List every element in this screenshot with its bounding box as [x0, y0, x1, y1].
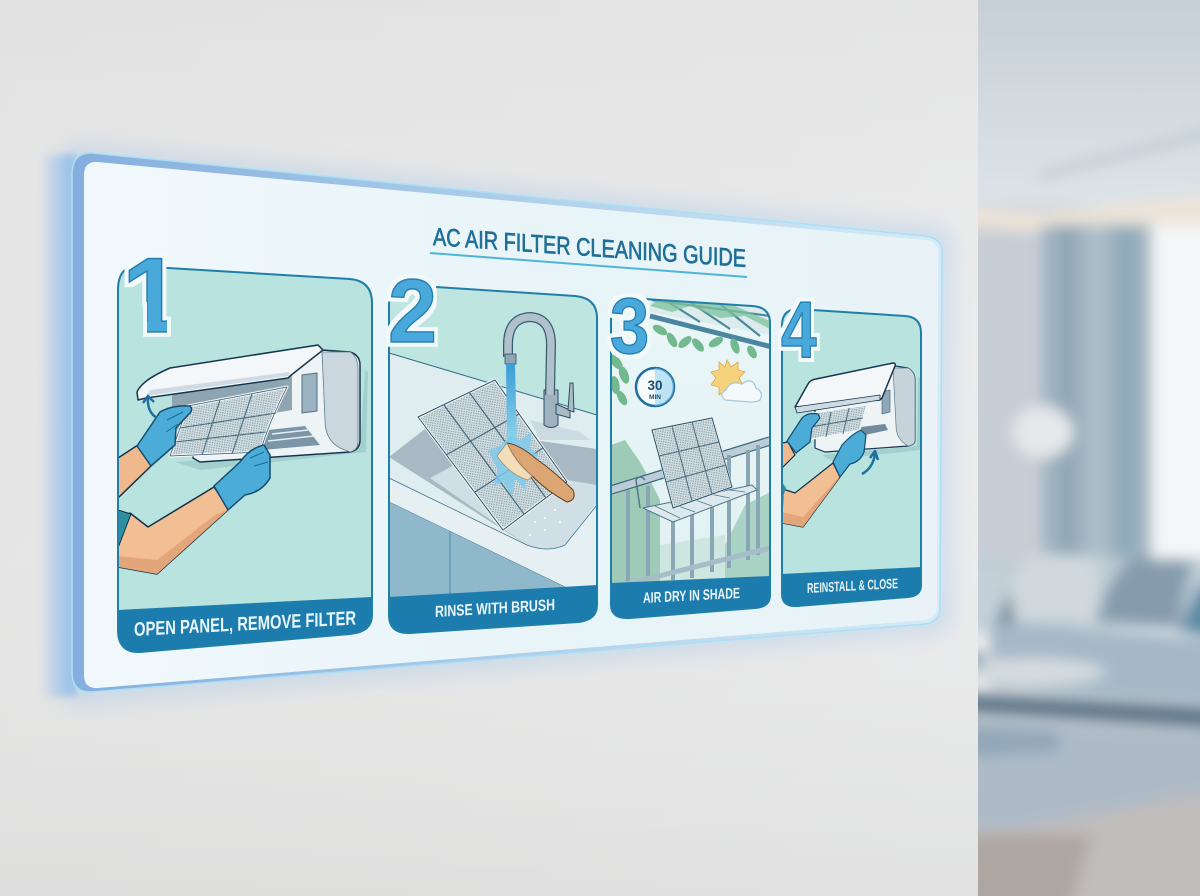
title underline [430, 253, 747, 277]
caption: RINSE WITH BRUSH [435, 597, 555, 621]
number 4: 4 [781, 285, 817, 375]
illustration: filter rinsed in sink with faucet and brush [389, 317, 597, 600]
banner [118, 597, 372, 652]
caption: OPEN PANEL, REMOVE FILTER [134, 607, 356, 641]
panel border [389, 285, 597, 633]
illustration: AC unit with filter removed by gloved hands [118, 345, 368, 574]
panel border [782, 309, 921, 606]
panel: step 3 air dry [607, 297, 775, 618]
illustration: filter reinstalled in AC unit [782, 363, 920, 527]
panel: step 1 open panel [118, 266, 372, 652]
caption: AIR DRY IN SHADE [643, 585, 740, 607]
banner [611, 576, 770, 618]
icon: 30 minute timer: MIN [649, 394, 661, 401]
banner [389, 585, 597, 633]
panel border [611, 298, 770, 618]
title: AC AIR FILTER CLEANING GUIDE [433, 223, 746, 273]
sign back glow [40, 154, 940, 698]
caption: REINSTALL & CLOSE [807, 575, 898, 596]
icon: 30 minute timer [636, 368, 674, 406]
background: blurred living room [978, 0, 1200, 896]
panel border [118, 266, 372, 652]
banner [782, 567, 921, 606]
panel: step 2 rinse [389, 285, 597, 633]
icon: 30 minute timer: 30 [647, 378, 663, 393]
icon: up arrow [143, 396, 157, 418]
icon: sun and cloud [711, 360, 761, 402]
number 3: 3 [610, 281, 649, 370]
illustration: filter drying on balcony rack [612, 300, 769, 583]
number 2: 2 [388, 260, 437, 361]
icon: up arrow [862, 451, 878, 474]
sign board [72, 153, 942, 692]
number 1: 1 [122, 235, 182, 355]
panel: step 4 reinstall [782, 309, 921, 606]
